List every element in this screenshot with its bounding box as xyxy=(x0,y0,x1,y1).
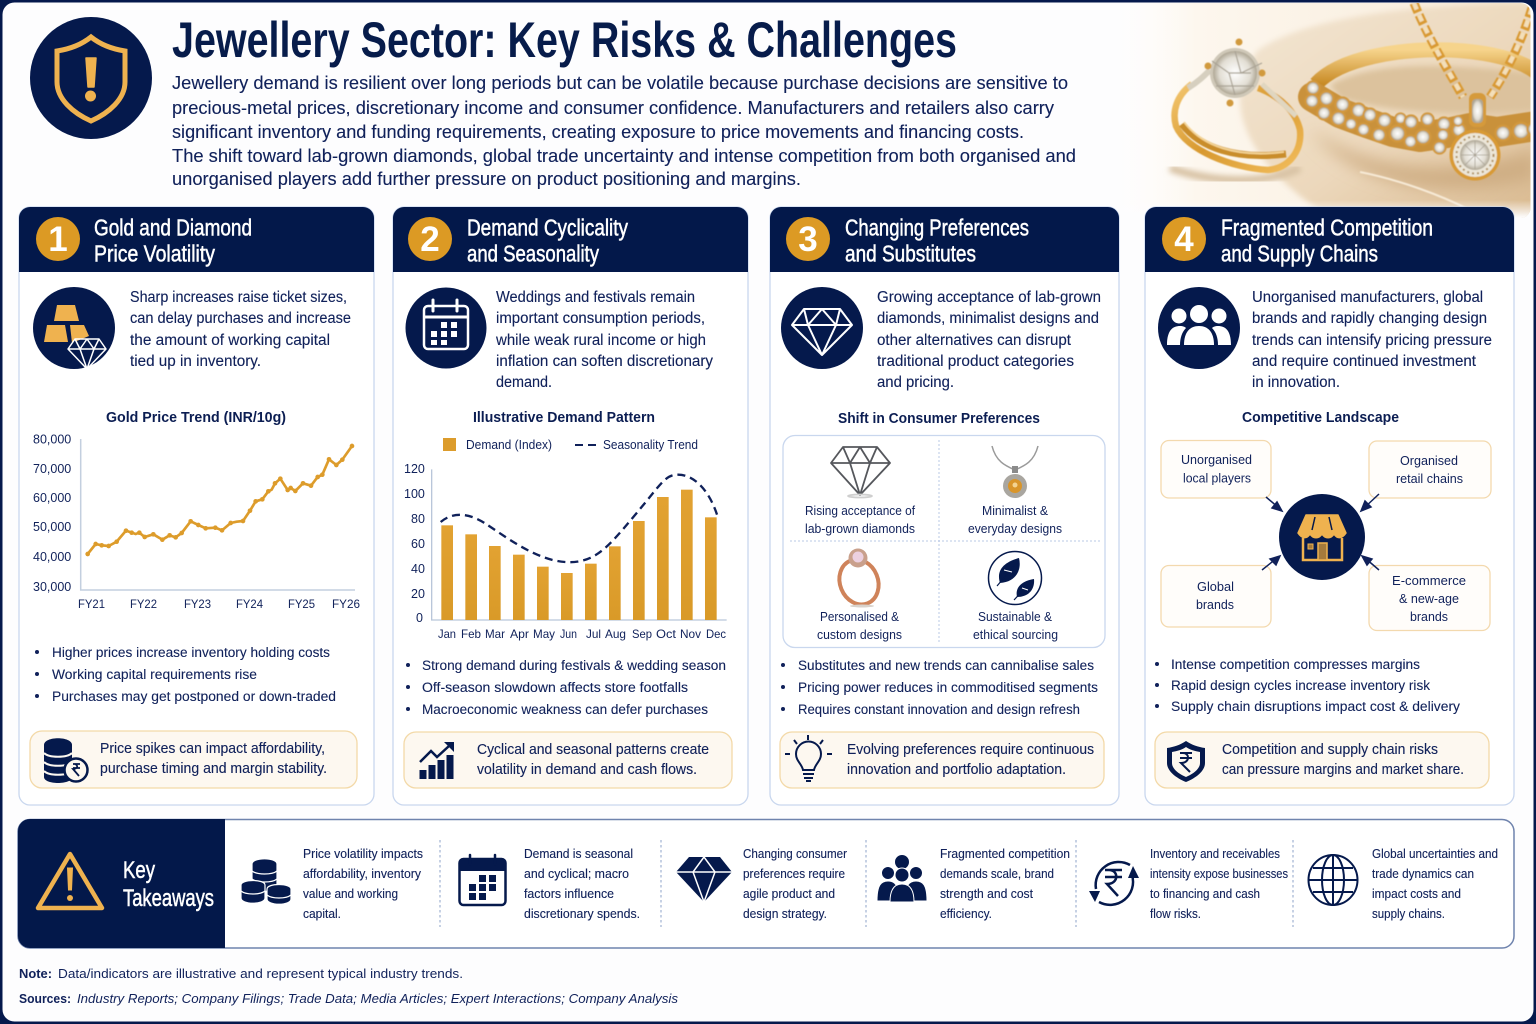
title: Jewellery Sector: Key Risks & Challenges xyxy=(172,12,957,68)
intro text: precious-metal prices, discretionary income and consumer confidence. Manufacturers and retailers also carry xyxy=(172,97,1055,118)
callout: cyclical patterns: volatility in demand and cash flows. xyxy=(477,762,697,778)
takeaway: seasonal demand: and cyclical; macro xyxy=(524,867,629,881)
box: organised retail chains: Organised xyxy=(1400,454,1458,468)
label: minimalist designs xyxy=(968,504,1062,536)
icon: people xyxy=(1158,287,1240,369)
callout: cyclical patterns xyxy=(404,732,732,788)
panel: fragmented competition and supply chains xyxy=(1145,207,1514,805)
label: minimalist designs: Minimalist & xyxy=(982,504,1049,518)
callout: price spikes: purchase timing and margin stability. xyxy=(100,761,327,777)
callout: competition risks: Competition and supply chain risks xyxy=(1222,742,1438,758)
panel 4 description: in innovation. xyxy=(1252,374,1340,391)
panel 1 description: the amount of working capital xyxy=(130,332,330,349)
line chart: gold price: FY25 xyxy=(288,597,315,611)
line chart: gold price: 30,000 xyxy=(33,580,71,594)
panel: demand cyclicality and seasonality xyxy=(393,207,748,805)
takeaway: global uncertainties: supply chains. xyxy=(1372,907,1445,921)
takeaway: fragmented competition: strength and cost xyxy=(940,887,1033,901)
panel 3 header: Changing Preferences xyxy=(845,214,1029,240)
panel 3 bullets: Pricing power reduces in commoditised segments xyxy=(798,680,1098,695)
key takeaways label: Takeaways xyxy=(123,885,214,912)
intro text: significant inventory and funding requirements, creating exposure to price movements and financing costs. xyxy=(172,121,1024,142)
panel 3 header: 3 xyxy=(798,220,818,259)
arrows into centre xyxy=(1262,494,1379,570)
line chart: gold price: FY21 xyxy=(78,597,105,611)
bar chart: demand by month: Aug xyxy=(605,627,626,641)
key takeaways label xyxy=(18,819,225,948)
box: unorganised local players xyxy=(1161,440,1271,498)
line chart: gold price: FY24 xyxy=(236,597,263,611)
panel 2 description: Weddings and festivals remain xyxy=(496,289,695,306)
panel 1 description: Sharp increases raise ticket sizes, xyxy=(130,289,347,306)
panel 4 bullets: Supply chain disruptions impact cost & delivery xyxy=(1171,699,1460,714)
bar chart: demand by month xyxy=(404,462,727,641)
line chart: gold price: 50,000 xyxy=(33,520,71,534)
panel 3 bullets xyxy=(781,658,1098,717)
icon: rising bar chart xyxy=(420,742,454,779)
panel 4 header: 4 xyxy=(1174,220,1194,259)
bar chart: demand by month: 100 xyxy=(404,487,425,501)
takeaway: price volatility: capital. xyxy=(303,907,341,921)
panel 1 header: Price Volatility xyxy=(94,240,215,266)
intro text: The shift toward lab-grown diamonds, global trade uncertainty and intense competition from both organised and xyxy=(172,145,1076,166)
panel 3 description: diamonds, minimalist designs and xyxy=(877,310,1099,327)
icon: calendar xyxy=(406,288,486,368)
icon: calendar xyxy=(460,855,506,905)
bar chart: demand by month: 20 xyxy=(411,587,425,601)
takeaway: price volatility: Price volatility impacts xyxy=(303,847,423,861)
takeaway: seasonal demand: discretionary spends. xyxy=(524,907,640,921)
box: global brands xyxy=(1161,566,1271,627)
takeaway: price volatility: affordability, inventory xyxy=(303,867,422,881)
takeaway: financing risks: to financing and cash xyxy=(1150,887,1260,901)
icon: coins xyxy=(241,859,291,904)
bar chart: demand by month: Feb xyxy=(461,627,481,641)
panel 3 bullets: Requires constant innovation and design refresh xyxy=(798,702,1080,717)
label: minimalist designs: everyday designs xyxy=(968,522,1062,536)
icon: personalised ring xyxy=(833,548,885,610)
panel 4 bullets: Rapid design cycles increase inventory risk xyxy=(1171,678,1430,693)
takeaway: global uncertainties: trade dynamics can xyxy=(1372,867,1474,881)
callout: cyclical patterns: Cyclical and seasonal patterns create xyxy=(477,742,709,758)
ring with solitaire xyxy=(1175,38,1300,170)
panel 2 description: inflation can soften discretionary xyxy=(496,353,713,370)
icon: leaves in circle xyxy=(988,552,1042,604)
diagram: competitive landscape xyxy=(1161,440,1491,630)
box: organised retail chains xyxy=(1369,441,1491,498)
panel: key takeaways xyxy=(18,819,1514,948)
box: e-commerce brands xyxy=(1369,566,1490,630)
panel 1 header xyxy=(19,207,374,272)
panel 2 description: while weak rural income or high xyxy=(495,332,706,349)
sources: Industry Reports; Company Filings; Trade Data; Media Articles; Expert Interactions; Company Analysis xyxy=(77,991,679,1006)
bar chart: demand by month: 80 xyxy=(411,512,425,526)
icon: light bulb xyxy=(785,735,832,781)
panel 4 header: and Supply Chains xyxy=(1221,240,1378,266)
bar chart: demand by month: Jan xyxy=(438,627,456,641)
callout: competition risks xyxy=(1155,732,1489,788)
panel 2 header: 2 xyxy=(420,220,440,259)
callout: price spikes: Price spikes can impact affordability, xyxy=(100,741,325,757)
panel 1 header: 1 xyxy=(48,220,68,259)
panel 3 description: other alternatives can disrupt xyxy=(877,332,1072,349)
panel 1 header: Gold and Diamond xyxy=(94,214,252,240)
icon: rupee cycle xyxy=(1089,862,1139,905)
box: unorganised local players: Unorganised xyxy=(1181,453,1252,467)
takeaway: fragmented competition: efficiency. xyxy=(940,907,992,921)
panel 2 bullets: Macroeconomic weakness can defer purchases xyxy=(422,702,708,717)
label: personalised designs: custom designs xyxy=(817,628,902,642)
takeaway: changing preferences: design strategy. xyxy=(743,907,827,921)
icon: people xyxy=(877,854,927,902)
icon: diamond xyxy=(781,287,863,369)
bar chart: demand by month: 120 xyxy=(404,462,425,476)
panel 1 bullets xyxy=(35,645,336,704)
bar chart: demand by month: Jun xyxy=(560,627,577,641)
line chart: gold price: 80,000 xyxy=(33,432,71,446)
callout: evolving preferences xyxy=(780,732,1104,788)
panel 3 description: and pricing. xyxy=(877,374,954,391)
bar chart: demand by month: Nov xyxy=(680,627,701,641)
necklace chain and pendant xyxy=(1414,3,1532,180)
panel 2 header xyxy=(393,207,748,272)
panel 4 description: Unorganised manufacturers, global xyxy=(1252,289,1483,306)
bar chart: demand by month: Apr xyxy=(510,627,529,641)
takeaway: financing risks: Inventory and receivables xyxy=(1150,847,1280,861)
icon: rupee shield xyxy=(1167,741,1205,782)
box: global brands: brands xyxy=(1196,598,1234,612)
intro text xyxy=(172,72,1076,189)
line chart: gold price: 60,000 xyxy=(33,491,71,505)
icon: minimalist pendant xyxy=(992,446,1038,498)
intro text: unorganised players add further pressure on product positioning and margins. xyxy=(172,168,801,189)
icon: coin stack with rupee xyxy=(44,738,88,783)
panel 4 header: Fragmented Competition xyxy=(1221,214,1433,240)
takeaway: financing risks xyxy=(1089,847,1288,921)
callout: evolving preferences: Evolving preferences require continuous xyxy=(847,742,1094,758)
panel 1 description xyxy=(130,289,351,370)
box: unorganised local players: local players xyxy=(1183,472,1251,486)
key takeaways label: Key xyxy=(123,857,155,884)
box: organised retail chains: retail chains xyxy=(1396,472,1463,486)
panel 3 description: Growing acceptance of lab-grown xyxy=(877,289,1101,306)
line chart: gold price: FY23 xyxy=(184,597,211,611)
bar chart: demand by month: 40 xyxy=(411,562,425,576)
takeaway: global uncertainties: impact costs and xyxy=(1372,887,1461,901)
chart heading: demand pattern: Illustrative Demand Pattern xyxy=(473,410,655,426)
photo: gold rings and necklace xyxy=(1164,3,1530,218)
bar chart: demand by month: Oct xyxy=(656,627,677,641)
panel 4 header xyxy=(1145,207,1514,272)
line chart: gold price: FY22 xyxy=(130,597,157,611)
label: personalised designs: Personalised & xyxy=(820,610,900,624)
panel 2 header: Demand Cyclicality xyxy=(467,214,628,240)
takeaway: fragmented competition: Fragmented competition xyxy=(940,847,1070,861)
label: sustainable sourcing: ethical sourcing xyxy=(973,628,1058,642)
panel 2 header: and Seasonality xyxy=(467,240,599,266)
bar chart: demand by month: Jul xyxy=(586,627,601,641)
panel 3 description: traditional product categories xyxy=(877,353,1074,370)
panel 4 description: brands and rapidly changing design xyxy=(1252,310,1487,327)
panel 3 description xyxy=(877,289,1101,391)
panel: changing preferences and substitutes xyxy=(770,207,1119,805)
icon: shield with exclamation mark xyxy=(30,17,152,139)
sources: Sources: xyxy=(19,991,71,1006)
icon: globe xyxy=(1308,855,1358,905)
panel 2 description: demand. xyxy=(496,374,552,391)
callout: price spikes xyxy=(30,731,357,788)
icon: lab-grown diamond xyxy=(831,447,890,498)
note: Note: xyxy=(19,966,52,981)
panel 1 bullets: Higher prices increase inventory holding costs xyxy=(52,645,330,660)
panel 1 description: tied up in inventory. xyxy=(130,353,261,370)
panel 4 description xyxy=(1252,289,1492,391)
panel 2 description xyxy=(495,289,713,391)
takeaway: price volatility xyxy=(241,847,423,921)
line chart: gold price: 40,000 xyxy=(33,550,71,564)
panel: gold and diamond price volatility xyxy=(19,207,374,805)
takeaway: global uncertainties xyxy=(1308,847,1498,921)
panel 3 header xyxy=(770,207,1119,272)
bar chart: demand by month: 60 xyxy=(411,537,425,551)
panel 3 header: and Substitutes xyxy=(845,240,976,266)
line chart: gold price: 70,000 xyxy=(33,462,71,476)
box: e-commerce brands: brands xyxy=(1410,610,1448,624)
takeaway: seasonal demand xyxy=(460,847,640,921)
label: sustainable sourcing: Sustainable & xyxy=(978,610,1053,624)
panel 4 description: and require continued investment xyxy=(1252,353,1477,370)
icon: gold bars and diamond xyxy=(33,287,115,369)
takeaway: changing preferences xyxy=(676,847,847,921)
line chart: gold price xyxy=(33,432,360,611)
panel 3 bullets: Substitutes and new trends can cannibalise sales xyxy=(798,658,1094,673)
takeaway: fragmented competition xyxy=(877,847,1070,921)
takeaway: changing preferences: preferences require xyxy=(743,867,845,881)
bar chart: demand by month: 0 xyxy=(416,611,423,625)
takeaway: financing risks: intensity expose businesses xyxy=(1150,867,1288,881)
takeaway: financing risks: flow risks. xyxy=(1150,907,1201,921)
panel 1 description: can delay purchases and increase xyxy=(130,310,351,327)
chart legend: Demand (Index) xyxy=(466,438,552,452)
line chart: gold price: FY26 xyxy=(332,597,360,611)
panel 4 description: trends can intensify pricing pressure xyxy=(1252,332,1492,349)
icon: solid diamond xyxy=(676,857,732,902)
takeaway: price volatility: value and working xyxy=(303,887,398,901)
panel 1 bullets: Working capital requirements rise xyxy=(52,667,257,682)
panel 2 bullets: Off-season slowdown affects store footfalls xyxy=(422,680,688,695)
box: e-commerce brands: & new-age xyxy=(1399,592,1459,606)
label: sustainable sourcing xyxy=(973,610,1058,642)
chart legend xyxy=(443,438,698,452)
box: e-commerce brands: E-commerce xyxy=(1392,574,1466,588)
panel 1 bullets: Purchases may get postponed or down-traded xyxy=(52,689,336,704)
label: lab-grown diamonds xyxy=(805,504,915,536)
takeaway: seasonal demand: Demand is seasonal xyxy=(524,847,633,861)
bar chart: demand by month: Mar xyxy=(485,627,505,641)
label: personalised designs xyxy=(817,610,902,642)
panel 2 bullets: Strong demand during festivals & wedding season xyxy=(422,658,726,673)
chart heading: gold price trend: Gold Price Trend (INR/10g) xyxy=(106,410,286,426)
chart legend: Seasonality Trend xyxy=(603,438,698,452)
takeaway: changing preferences: Changing consumer xyxy=(743,847,847,861)
takeaway: changing preferences: agile product and xyxy=(743,887,835,901)
panel 2 bullets xyxy=(406,658,726,717)
takeaway: seasonal demand: factors influence xyxy=(524,887,614,901)
box: global brands: Global xyxy=(1197,580,1234,594)
bar chart: demand by month: Dec xyxy=(706,627,726,641)
panel 2 description: important consumption periods, xyxy=(496,310,705,327)
bar chart: demand by month: May xyxy=(533,627,555,641)
intro text: Jewellery demand is resilient over long periods but can be volatile because purchase decisions are sensitive to xyxy=(172,72,1068,93)
chart heading: competitive landscape: Competitive Landscape xyxy=(1242,410,1399,426)
panel 4 bullets xyxy=(1155,657,1460,714)
callout: competition risks: can pressure margins and market share. xyxy=(1222,762,1464,778)
bangle xyxy=(1304,50,1536,155)
panel 4 bullets: Intense competition compresses margins xyxy=(1171,657,1420,672)
label: lab-grown diamonds: lab-grown diamonds xyxy=(805,522,915,536)
takeaway: global uncertainties: Global uncertainties and xyxy=(1372,847,1498,861)
takeaway: fragmented competition: demands scale, brand xyxy=(940,867,1054,881)
bar chart: demand by month: Sep xyxy=(632,627,652,641)
icon: store in circle xyxy=(1279,494,1365,580)
label: lab-grown diamonds: Rising acceptance of xyxy=(805,504,915,518)
chart heading: consumer preferences: Shift in Consumer Preferences xyxy=(838,411,1040,427)
preferences grid xyxy=(783,436,1105,648)
callout: evolving preferences: innovation and portfolio adaptation. xyxy=(847,762,1066,778)
note: Data/indicators are illustrative and represent typical industry trends. xyxy=(58,966,463,981)
